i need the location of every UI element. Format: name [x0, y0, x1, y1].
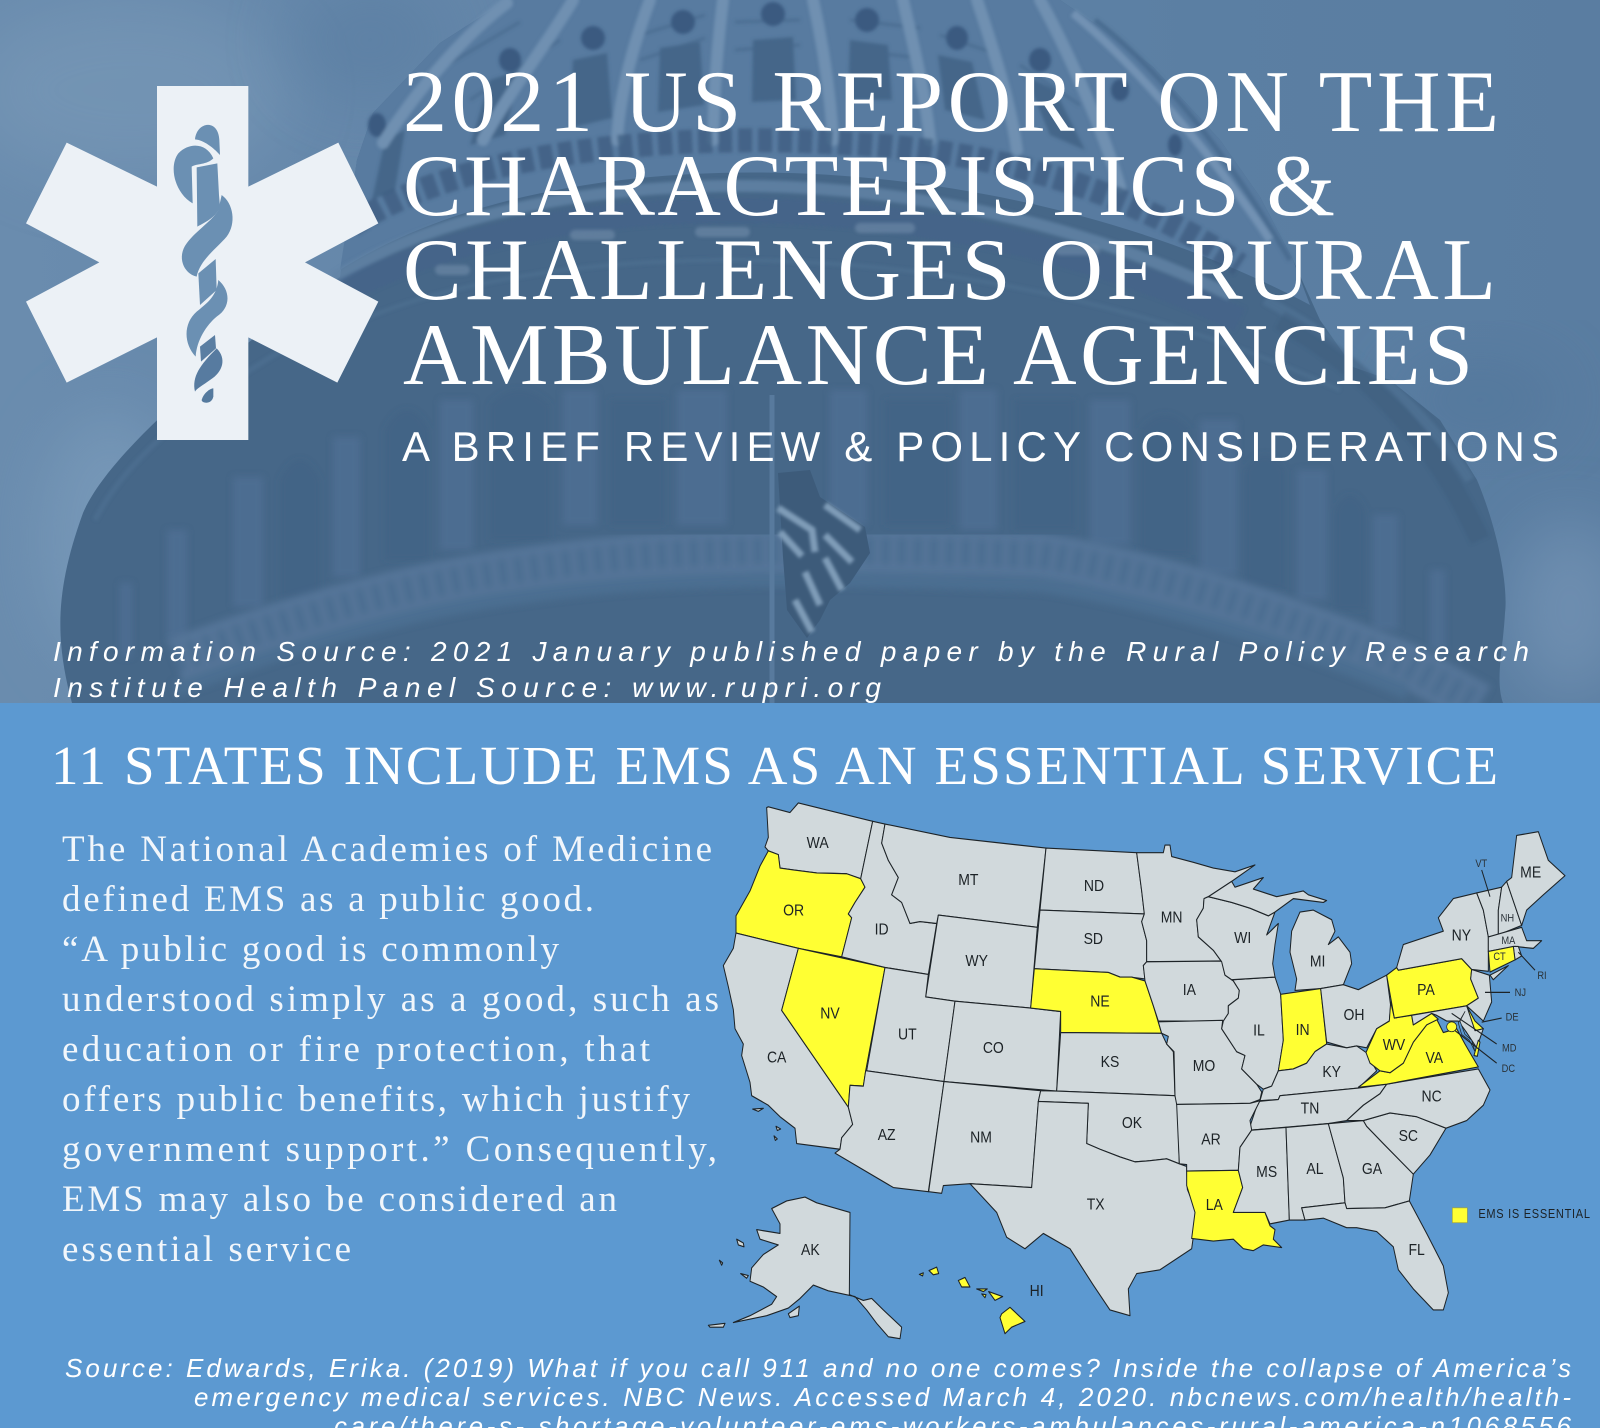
map: western states: WA — [807, 834, 830, 852]
source citation — [65, 1353, 1572, 1428]
ledge — [335, 186, 1230, 295]
legend: EMS is essential: EMS IS ESSENTIAL — [1478, 1206, 1590, 1221]
upper dome surface — [340, 0, 1310, 305]
map: eastern states: LA — [1206, 1196, 1224, 1214]
map: eastern states: SC — [1399, 1127, 1418, 1145]
map: eastern states: NH — [1501, 913, 1514, 925]
map: eastern states: FL — [1408, 1241, 1425, 1259]
map: western states: MT — [958, 871, 978, 889]
ornament band — [352, 140, 1240, 265]
body text: public good definition: The National Academies of Medicine — [62, 829, 712, 870]
title: AMBULANCE AGENCIES — [403, 307, 1473, 404]
map: eastern states: WI — [1234, 929, 1251, 947]
map: eastern states: TN — [1301, 1100, 1319, 1118]
map: western states: CO — [983, 1039, 1004, 1057]
map: United States essential service states — [708, 803, 1590, 1339]
map: western states: NM — [970, 1129, 992, 1147]
map: eastern states — [1137, 832, 1565, 1310]
map: western states: TX — [1087, 1195, 1105, 1214]
map: eastern states: MS — [1256, 1163, 1277, 1181]
map: eastern states: ME — [1520, 864, 1541, 882]
source citation: Source: Edwards, Erika. (2019) What if you call 911 and no one comes? Inside the collapse of America’s — [65, 1353, 1571, 1383]
map: eastern states: DC — [1502, 1063, 1515, 1075]
map: eastern states: AR — [1201, 1131, 1221, 1149]
map: eastern states: MA — [1501, 935, 1516, 947]
map: western states: HI — [1030, 1282, 1044, 1300]
body text: public good definition: offers public benefits, which justify — [62, 1079, 690, 1120]
body text: public good definition: “A public good is commonly — [62, 929, 560, 970]
map: eastern states: WV — [1383, 1036, 1405, 1054]
icon: star of life — [26, 86, 378, 440]
body text: public good definition: understood simply as a good, such as — [62, 979, 719, 1020]
balustrade — [175, 550, 1480, 705]
map: eastern states: MD — [1502, 1043, 1516, 1055]
dome silhouette — [60, 0, 1506, 703]
icon: DC marker — [1447, 1022, 1457, 1032]
map: western states: KS — [1101, 1053, 1119, 1071]
information source note — [53, 636, 1529, 703]
map: eastern states: AL — [1306, 1160, 1324, 1178]
panel: capitol dome header background — [0, 0, 1600, 705]
map: western states: OR — [783, 902, 804, 920]
map: eastern states: VA — [1426, 1049, 1444, 1067]
map: western states: AZ — [878, 1126, 896, 1144]
map: western states: UT — [898, 1026, 917, 1044]
map: eastern states: NC — [1422, 1088, 1442, 1106]
map: eastern states: VT — [1475, 858, 1487, 870]
map: eastern states: MI — [1310, 953, 1325, 971]
map: eastern states: NY — [1452, 927, 1471, 945]
flag and pole — [772, 395, 870, 703]
information source note: Institute Health Panel Source: www.rupri.org — [53, 672, 881, 703]
map: western states: NV — [820, 1005, 840, 1023]
title: 2021 US REPORT ON THE — [403, 54, 1499, 151]
map: western states — [708, 803, 1197, 1339]
map: eastern states: KY — [1322, 1063, 1341, 1081]
title: CHALLENGES OF RURAL — [403, 222, 1496, 319]
map: eastern states: GA — [1362, 1160, 1383, 1178]
map: eastern states: PA — [1417, 981, 1436, 999]
map: western states: ND — [1084, 877, 1104, 895]
map: eastern states: CT — [1493, 951, 1506, 963]
map: eastern states: RI — [1537, 970, 1547, 982]
map: eastern states: IN — [1296, 1021, 1310, 1039]
panel: essential service section background — [0, 703, 1600, 1428]
source citation: emergency medical services. NBC News. Accessed March 4, 2020. nbcnews.com/health/health- — [194, 1382, 1571, 1412]
map: eastern states: IA — [1183, 981, 1197, 999]
map: western states: NE — [1090, 993, 1110, 1011]
map: eastern states: OH — [1344, 1006, 1364, 1024]
body text: public good definition — [62, 829, 719, 1270]
body text: public good definition: government support.” Consequently, — [62, 1129, 717, 1170]
map: eastern states: NJ — [1515, 988, 1526, 999]
title: CHARACTERISTICS & — [403, 138, 1335, 235]
map: western states: AK — [801, 1241, 820, 1259]
body text: public good definition: defined EMS as a public good. — [62, 879, 594, 920]
information source note: Information Source: 2021 January published paper by the Rural Policy Research — [53, 636, 1529, 667]
map: eastern states: MO — [1193, 1057, 1215, 1075]
map: eastern states: DE — [1506, 1012, 1519, 1024]
body text: public good definition: education or fire protection, that — [62, 1029, 651, 1070]
title — [403, 54, 1499, 404]
map: eastern states: IL — [1253, 1022, 1265, 1040]
map: western states: CA — [767, 1049, 787, 1067]
body text: public good definition: EMS may also be considered an — [62, 1179, 617, 1220]
icon: rod and serpent — [174, 125, 233, 403]
map: western states: SD — [1084, 930, 1103, 948]
body text: public good definition: essential service — [62, 1229, 351, 1270]
map: eastern states: MN — [1161, 908, 1183, 927]
section heading: 11 STATES INCLUDE EMS AS AN ESSENTIAL SERVICE — [51, 735, 1498, 796]
map: western states: ID — [875, 921, 889, 939]
map: western states: OK — [1122, 1114, 1142, 1132]
drum pilasters and arches — [120, 390, 1445, 657]
map: western states: WY — [965, 952, 988, 970]
subtitle: A BRIEF REVIEW & POLICY CONSIDERATIONS — [402, 423, 1559, 470]
